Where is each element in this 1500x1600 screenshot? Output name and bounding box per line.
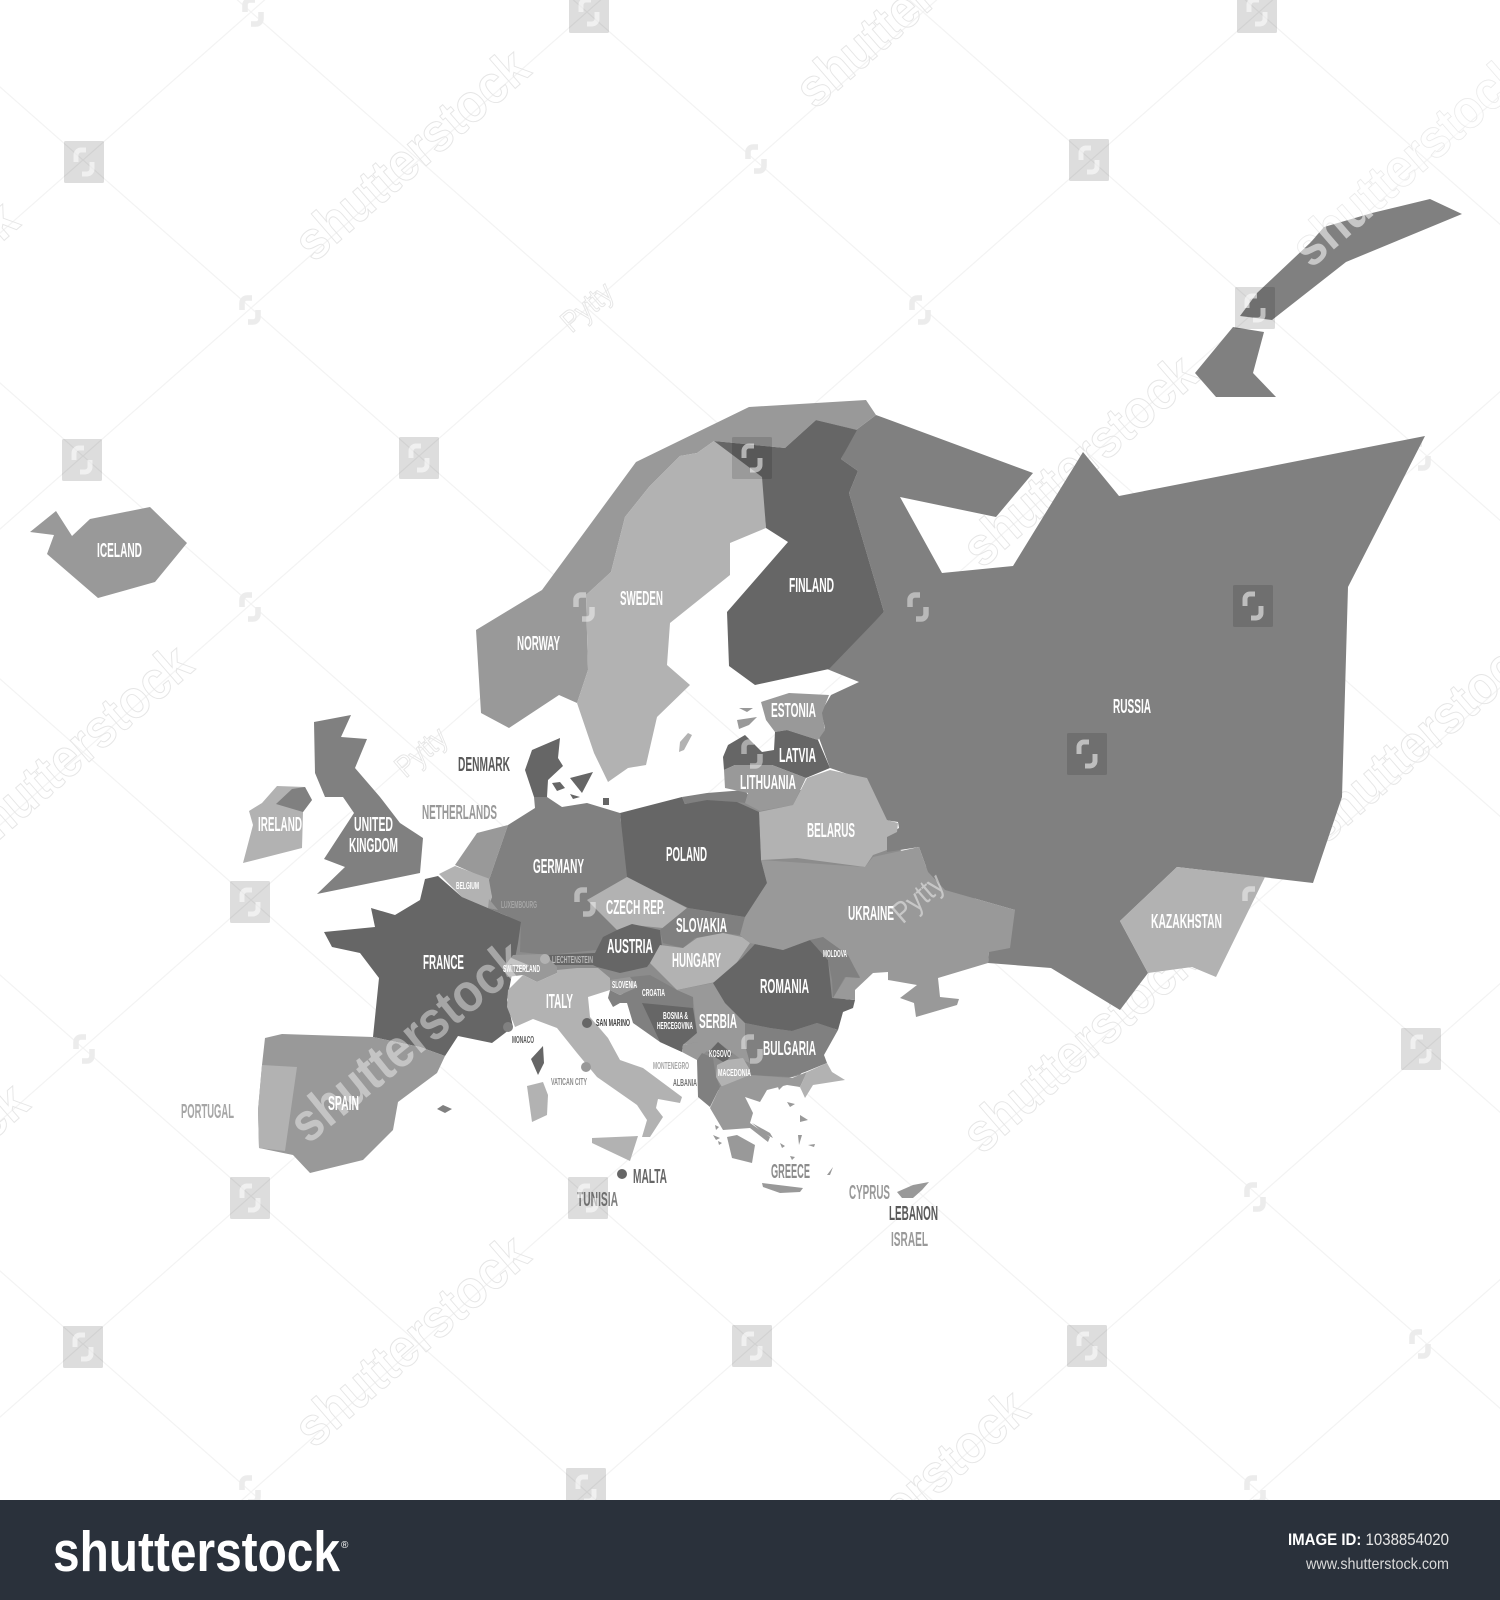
country: Germany — [488, 797, 627, 955]
country: France — [324, 876, 521, 1056]
country: Croatia — [608, 975, 693, 1052]
island: Gotland — [679, 733, 692, 752]
country: Hungary — [650, 933, 750, 990]
label: Latvia: LATVIA — [779, 745, 816, 767]
country: Turkey (European part) — [800, 1063, 845, 1098]
country labels: BELARUS — [807, 820, 855, 842]
country labels: IRELAND — [258, 814, 302, 836]
country labels: NORWAY — [517, 633, 560, 655]
map of Europe: country shapes — [30, 199, 1462, 1198]
watermark text layer beneath the map: shutterstock — [283, 36, 541, 272]
country labels: NETHERLANDS — [422, 802, 497, 824]
label: United Kingdom: KINGDOM — [349, 835, 398, 857]
country: Lithuania — [724, 765, 806, 811]
label: Albania: ALBANIA — [673, 1077, 697, 1089]
country: Italy — [507, 968, 682, 1137]
registered mark: ® — [341, 1540, 349, 1551]
label: Bulgaria: BULGARIA — [763, 1038, 816, 1060]
country: Denmark — [525, 738, 609, 805]
country labels: CZECH REP. — [606, 897, 665, 919]
country: Romania — [713, 940, 855, 1031]
watermark text layer beneath the map: shutterstock — [951, 928, 1209, 1164]
island: Sicily — [592, 1136, 638, 1161]
country: Czech Republic — [587, 877, 687, 930]
land underlay closing seams between countries — [490, 790, 1000, 1090]
country: United Kingdom — [276, 715, 423, 894]
country labels: POLAND — [666, 844, 707, 866]
label: Lithuania: LITHUANIA — [740, 772, 796, 794]
label: United Kingdom — [349, 814, 398, 857]
country: Macedonia — [716, 1058, 750, 1087]
footer logo: shutterstock — [53, 1520, 340, 1584]
label: Germany: GERMANY — [533, 856, 584, 878]
country labels: MOLDOVA — [823, 948, 847, 960]
country labels: SWITZERLAND — [503, 963, 540, 975]
image id: IMAGE ID: 1038854020 — [1288, 1530, 1449, 1549]
country: Switzerland — [503, 954, 557, 982]
country: Moldova — [810, 937, 860, 998]
label: Bosnia and Hercegovina: BOSNIA & — [663, 1010, 688, 1022]
country labels: LEBANON — [889, 1203, 938, 1225]
country labels: MONTENEGRO — [653, 1060, 689, 1072]
footer bar — [0, 1500, 1500, 1600]
country: Portugal — [258, 1065, 297, 1151]
watermark text layer beneath the map: Pytty — [389, 721, 454, 784]
country labels: CYPRUS — [849, 1182, 890, 1204]
country labels: LIECHTENSTEIN — [552, 954, 593, 966]
label: Bosnia and Hercegovina — [657, 1010, 693, 1032]
country: Kosovo — [708, 1042, 732, 1063]
watermark text layer beneath the map: Pytty — [555, 276, 620, 339]
label: Denmark: DENMARK — [458, 754, 510, 776]
label: Serbia: SERBIA — [699, 1011, 737, 1033]
label: Kazakhstan: KAZAKHSTAN — [1151, 911, 1222, 933]
label: Iceland: ICELAND — [97, 540, 142, 562]
country: Finland — [714, 420, 884, 685]
label: Vatican City: VATICAN CITY — [551, 1076, 587, 1088]
watermark text layer beneath the map: shutterstock — [951, 342, 1209, 578]
country: Russia far east — [1195, 199, 1462, 397]
country: Poland — [620, 797, 767, 917]
country: Estonia — [737, 693, 829, 740]
label: United Kingdom: UNITED — [354, 814, 393, 836]
country: Luxembourg — [488, 899, 498, 910]
label: Finland: FINLAND — [789, 575, 834, 597]
country labels — [97, 540, 1222, 1251]
island: Corsica — [531, 1046, 544, 1075]
label: Israel: ISRAEL — [891, 1229, 928, 1251]
website url: www.shutterstock.com — [1305, 1556, 1449, 1573]
country: Russia — [819, 415, 1425, 1010]
island: Sardinia — [527, 1082, 548, 1122]
country: Iceland — [30, 507, 187, 598]
country labels: KOSOVO — [709, 1048, 731, 1060]
country labels: HERCEGOVINA — [657, 1020, 693, 1032]
country: Greece — [710, 1072, 833, 1193]
country: Slovakia — [660, 908, 745, 948]
country: Ireland — [243, 786, 312, 863]
country: Sweden — [577, 441, 766, 782]
dot: Vatican City — [581, 1062, 591, 1072]
label: Tunisia: TUNISIA — [577, 1189, 618, 1211]
country: Kaliningrad — [682, 790, 748, 804]
dot: Liechtenstein — [540, 954, 550, 964]
country: Latvia — [723, 730, 830, 778]
country: Bosnia and Herzegovina — [642, 1003, 697, 1052]
label: Spain: SPAIN — [328, 1093, 359, 1115]
country labels: SLOVENIA — [612, 979, 637, 991]
country labels: SWEDEN — [620, 588, 663, 610]
country: Netherlands — [455, 825, 508, 880]
country: Montenegro — [682, 1042, 708, 1060]
country: Kazakhstan — [1120, 867, 1265, 977]
country labels: GREECE — [771, 1161, 810, 1183]
country: Austria — [547, 924, 662, 973]
country: Albania — [697, 1053, 720, 1107]
country: Belarus — [759, 770, 898, 867]
country labels: FRANCE — [423, 952, 464, 974]
country labels: LUXEMBOURG — [501, 899, 537, 911]
country: Belgium — [439, 866, 492, 908]
label: Macedonia: MACEDONIA — [718, 1067, 751, 1079]
country: Norway — [476, 400, 876, 728]
label: Austria: AUSTRIA — [607, 936, 653, 958]
island: Cyprus — [897, 1182, 929, 1198]
dot: Monaco — [503, 1022, 513, 1032]
label: San Marino: SAN MARINO — [596, 1017, 630, 1029]
label: Malta: MALTA — [633, 1166, 667, 1188]
label: Estonia: ESTONIA — [771, 700, 816, 722]
country: Spain — [258, 1034, 445, 1173]
label: Italy: ITALY — [546, 991, 573, 1013]
watermark overlay above the map: shutterstock — [278, 928, 538, 1154]
watermark overlay above the map: Pytty — [886, 867, 951, 930]
country labels: CROATIA — [642, 987, 665, 999]
country labels: HUNGARY — [672, 950, 721, 972]
country: Serbia — [677, 983, 750, 1063]
dot: San Marino — [582, 1018, 592, 1028]
watermark text layer beneath the map: shutterstock — [283, 1222, 541, 1458]
country labels: PORTUGAL — [181, 1101, 234, 1123]
label: Ukraine: UKRAINE — [848, 903, 894, 925]
country labels: BELGIUM — [456, 880, 479, 892]
label: Russia: RUSSIA — [1113, 696, 1151, 718]
dot: Malta — [617, 1169, 627, 1179]
label: Slovakia: SLOVAKIA — [676, 915, 727, 937]
island: Balearics — [437, 1105, 452, 1113]
country labels: MONACO — [512, 1034, 534, 1046]
country: Bulgaria — [745, 1023, 838, 1077]
label: Romania: ROMANIA — [760, 976, 809, 998]
country: Ukraine — [740, 847, 1015, 1017]
country: Slovenia — [610, 977, 638, 995]
